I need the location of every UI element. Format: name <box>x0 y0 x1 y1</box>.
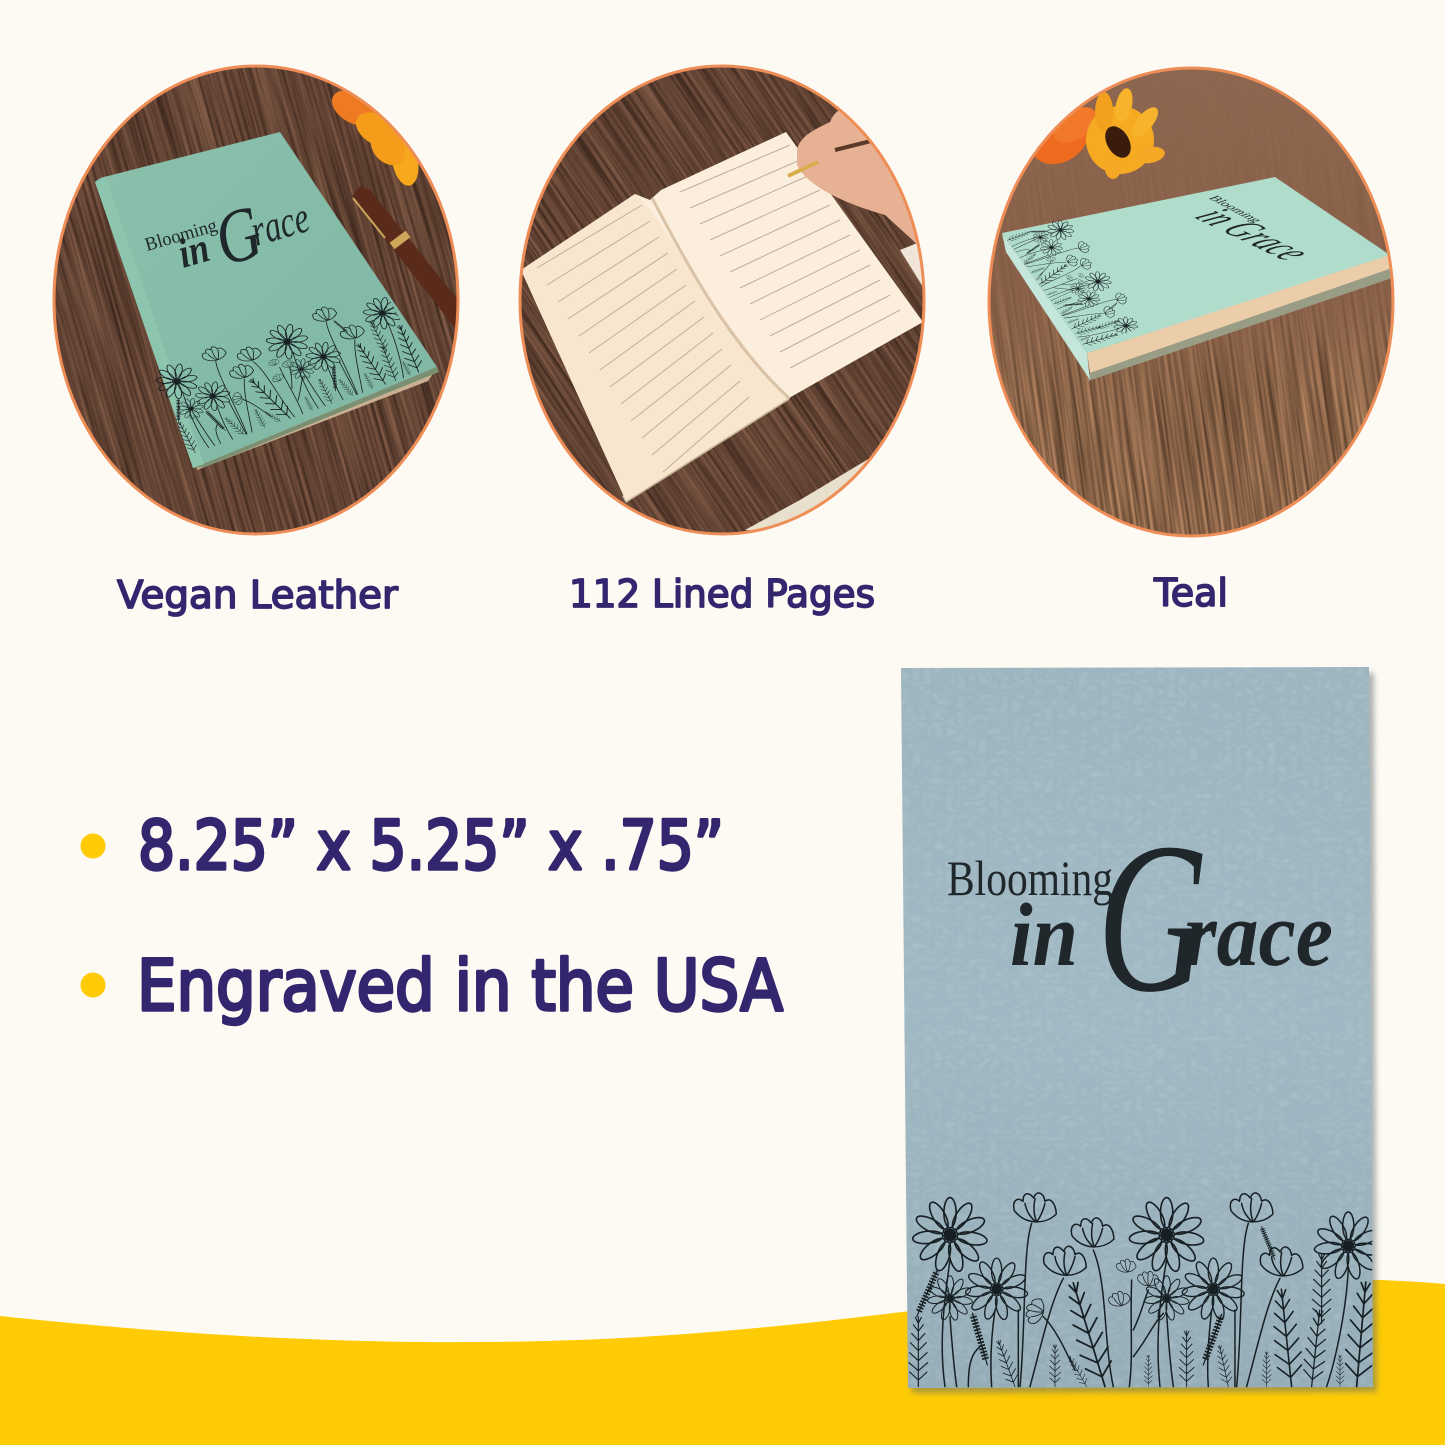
photo: vegan leather journal <box>52 64 460 536</box>
photo: teal colour journal <box>988 66 1394 538</box>
photo: vegan leather journal: Blooming <box>143 215 220 256</box>
caption: 112 lined pages: 112 Lined Pages <box>569 572 875 616</box>
photo: teal colour journal: in Grace <box>1183 204 1325 265</box>
cover title <box>947 798 1333 1037</box>
cover title: G <box>1097 798 1209 1037</box>
photo: vegan leather journal: race <box>245 193 315 256</box>
yellow wave <box>0 1279 1445 1445</box>
caption: teal: Teal <box>1153 571 1228 615</box>
cover title: in <box>1010 886 1078 985</box>
caption: vegan leather: Vegan Leather <box>117 573 398 617</box>
cover title: race <box>1184 883 1333 985</box>
cover title: Blooming <box>947 850 1113 906</box>
photo: vegan leather journal: G <box>206 189 271 282</box>
bullet: engraved in the USA: Engraved in the USA <box>137 945 783 1027</box>
bullet: dimensions: 8.25” x 5.25” x .75” <box>138 807 724 886</box>
photo: lined pages <box>518 64 926 536</box>
journal cover product image <box>900 665 1383 1393</box>
photo: vegan leather journal: in <box>173 225 215 278</box>
photo: teal colour journal: Blooming <box>1205 194 1267 224</box>
wildflower engraving <box>909 1193 1383 1391</box>
